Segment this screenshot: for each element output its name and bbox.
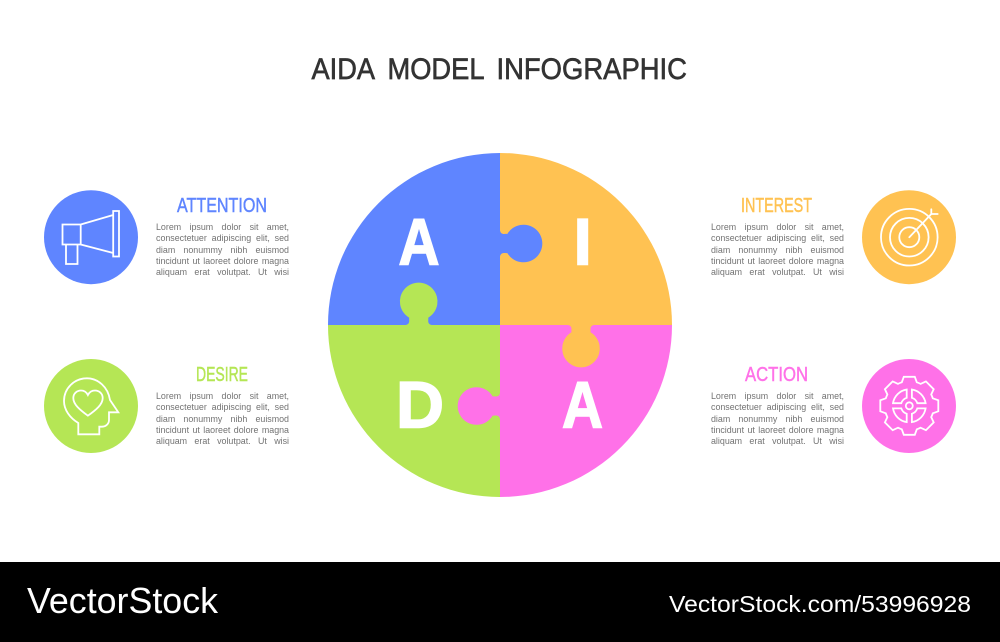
text block: action: aliquam erat volutpat. Ut wisi bbox=[711, 436, 844, 446]
text block: action: tincidunt ut laoreet dolore magna bbox=[711, 425, 844, 435]
letter D: D bbox=[396, 368, 444, 442]
icon: target with arrow bbox=[862, 190, 956, 284]
text block: desire bbox=[156, 391, 289, 446]
text block: interest: diam nonummy nibh euismod bbox=[711, 244, 844, 254]
icon: gear bbox=[862, 359, 956, 453]
text block: action: consectetuer adipiscing elit, sed bbox=[711, 402, 844, 412]
letter A: A bbox=[398, 204, 440, 278]
text block: action: Lorem ipsum dolor sit amet, bbox=[711, 391, 844, 401]
title: AIDA bbox=[312, 53, 375, 86]
panel: interest bbox=[711, 190, 956, 284]
green puzzle knob bbox=[400, 283, 438, 326]
text block: action: diam nonummy nibh euismod bbox=[711, 414, 844, 424]
icon: megaphone bbox=[44, 190, 138, 284]
puzzle piece: green D quadrant bbox=[328, 325, 500, 497]
text block: desire: diam nonummy nibh euismod bbox=[156, 414, 289, 424]
footer band bbox=[0, 562, 1000, 642]
text block: interest: consectetuer adipiscing elit, sed bbox=[711, 233, 844, 243]
title bbox=[311, 53, 687, 86]
text block: desire: consectetuer adipiscing elit, sed bbox=[156, 402, 289, 412]
text block: attention: diam nonummy nibh euismod bbox=[156, 244, 289, 254]
letter A: A bbox=[562, 368, 603, 442]
text block: attention: aliquam erat volutpat. Ut wisi bbox=[156, 267, 289, 277]
text block: attention: tincidunt ut laoreet dolore magna bbox=[156, 256, 289, 266]
pink puzzle knob bbox=[458, 387, 501, 425]
puzzle circle chart bbox=[328, 153, 672, 497]
text block: action bbox=[711, 391, 844, 446]
footer image id: VectorStock.com/53996928 bbox=[669, 591, 971, 617]
panel: attention bbox=[44, 190, 289, 284]
text block: desire: aliquam erat volutpat. Ut wisi bbox=[156, 436, 289, 446]
text block: desire: Lorem ipsum dolor sit amet, bbox=[156, 391, 289, 401]
text block: interest: tincidunt ut laoreet dolore magna bbox=[711, 256, 844, 266]
puzzle piece: orange I quadrant bbox=[500, 153, 672, 325]
title: MODEL bbox=[388, 53, 484, 86]
puzzle piece: blue A quadrant bbox=[328, 153, 500, 325]
text block: attention: Lorem ipsum dolor sit amet, bbox=[156, 222, 289, 232]
text block: attention bbox=[156, 222, 289, 277]
text block: attention: consectetuer adipiscing elit, sed bbox=[156, 233, 289, 243]
blue puzzle knob bbox=[499, 225, 542, 262]
text block: interest: Lorem ipsum dolor sit amet, bbox=[711, 222, 844, 232]
title: INFOGRAPHIC bbox=[496, 53, 687, 86]
puzzle piece: pink A quadrant bbox=[500, 325, 672, 497]
panel: desire bbox=[44, 359, 289, 453]
text block: interest bbox=[711, 222, 844, 277]
letter I: I bbox=[574, 204, 592, 278]
panel: action bbox=[711, 359, 956, 453]
footer logo text: VectorStock bbox=[27, 580, 219, 621]
text block: interest: aliquam erat volutpat. Ut wisi bbox=[711, 267, 844, 277]
icon: head with heart bbox=[44, 359, 138, 453]
text block: desire: tincidunt ut laoreet dolore magna bbox=[156, 425, 289, 435]
orange puzzle knob bbox=[562, 324, 600, 367]
